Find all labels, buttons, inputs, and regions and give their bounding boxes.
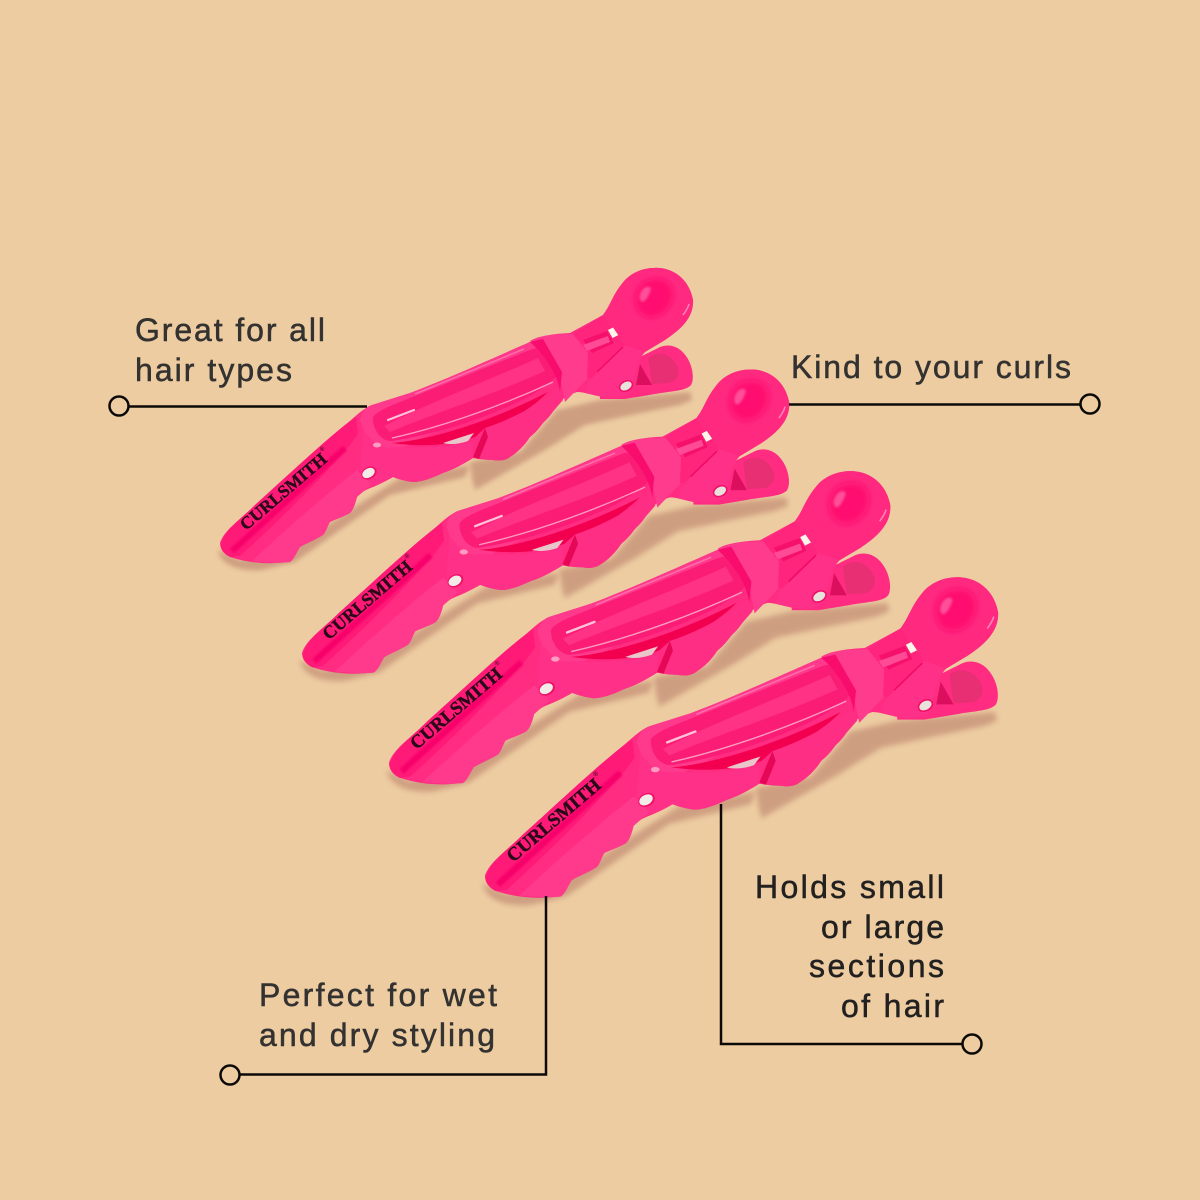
brand logo clip 2: ® xyxy=(404,552,412,561)
label: holds small or large sections of hair xyxy=(755,869,944,1024)
brand logo clip 2: CURLSMITH xyxy=(318,556,416,644)
brand logo clip 4: ® xyxy=(591,769,600,778)
label: perfect for wet and dry styling: and dry styling xyxy=(259,1017,495,1053)
label: holds small or large sections of hair: Holds small xyxy=(755,869,944,905)
callout: kind to your curls xyxy=(789,349,1100,414)
brand logo clip 1: CURLSMITH xyxy=(236,448,331,534)
label: holds small or large sections of hair: of hair xyxy=(841,988,944,1024)
label: perfect for wet and dry styling xyxy=(259,977,497,1053)
label: great for all hair types: hair types xyxy=(135,352,292,388)
brand logo clip 3: ® xyxy=(493,658,502,668)
label: great for all hair types xyxy=(135,312,325,388)
label: holds small or large sections of hair: or large xyxy=(821,909,944,945)
label: great for all hair types: Great for all xyxy=(135,312,325,348)
label: perfect for wet and dry styling: Perfect for wet xyxy=(259,977,497,1013)
callout: holds small or large sections of hair xyxy=(721,804,982,1054)
callout: perfect for wet and dry styling xyxy=(220,896,546,1084)
clip 2 xyxy=(300,369,789,681)
brand logo clip 4: CURLSMITH xyxy=(503,775,606,867)
clip 1 xyxy=(218,268,693,570)
brand logo clip 3: CURLSMITH xyxy=(406,663,507,754)
callout: great for all hair types xyxy=(110,312,367,416)
clip 3 xyxy=(387,471,890,792)
brand logo clip 1: ® xyxy=(318,445,327,453)
clip 4 xyxy=(483,577,998,906)
label: kind to your curls: Kind to your curls xyxy=(791,349,1071,385)
label: holds small or large sections of hair: sections xyxy=(809,948,944,984)
